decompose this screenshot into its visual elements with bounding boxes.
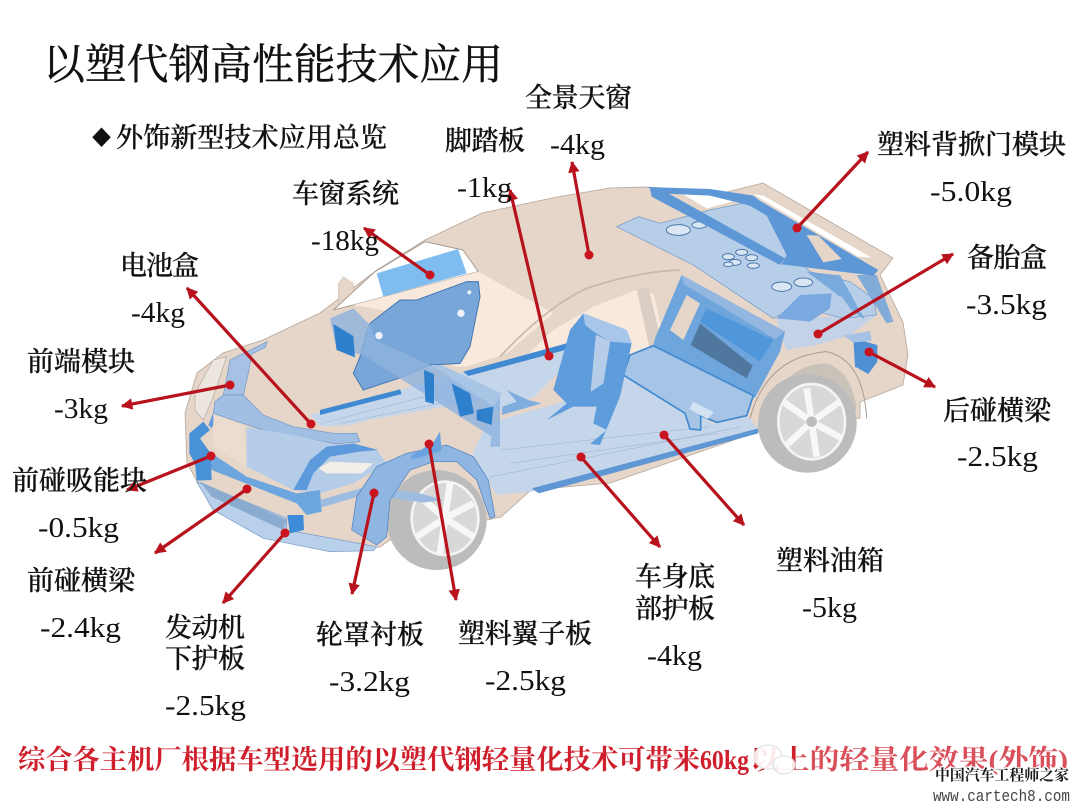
label: rear beam bbox=[943, 396, 1053, 473]
label: engine undershield: 发动机 bbox=[165, 613, 245, 643]
front seat frame bbox=[547, 313, 632, 445]
label: window system bbox=[292, 179, 400, 257]
label: front energy absorber bbox=[12, 466, 147, 544]
label: wheel liner bbox=[316, 620, 424, 698]
arrow: engine undershield bbox=[223, 528, 290, 603]
tailgate top rail bbox=[647, 187, 773, 216]
floor grooves bbox=[322, 387, 742, 477]
label: plastic tailgate: -5.0kg bbox=[930, 176, 1012, 208]
label: panoramic roof: 全景天窗 bbox=[525, 83, 632, 113]
label: plastic fender: -2.5kg bbox=[485, 665, 566, 697]
label: front end module: 前端模块 bbox=[27, 347, 135, 377]
seat top band bbox=[583, 313, 632, 343]
rear seat top band bbox=[682, 275, 785, 339]
label: underbody shield: 部护板 bbox=[635, 594, 715, 624]
upper dark strut bbox=[208, 400, 222, 428]
strip: left rocker bbox=[320, 342, 575, 415]
side interior bbox=[520, 290, 667, 362]
label: wheel liner: -3.2kg bbox=[329, 666, 410, 698]
cross support bbox=[320, 487, 443, 507]
label: wheel liner: 轮罩衬板 bbox=[316, 620, 424, 650]
grille bbox=[213, 413, 247, 467]
label: front energy absorber: 前碰吸能块 bbox=[12, 466, 147, 496]
sill strip bbox=[532, 428, 758, 493]
dark brackets bbox=[333, 324, 493, 425]
front beam bbox=[195, 437, 322, 515]
arrow: fender bbox=[424, 440, 456, 600]
rear wheel bbox=[750, 352, 867, 473]
tailgate left rail bbox=[650, 188, 785, 265]
arrow: front end module bbox=[122, 380, 234, 406]
floor bbox=[310, 342, 758, 495]
label: engine undershield: 下护板 bbox=[165, 644, 245, 674]
energy absorber bbox=[189, 422, 212, 481]
tray deep section bbox=[777, 293, 832, 322]
cooling opening bbox=[318, 462, 373, 473]
rear components bbox=[617, 187, 893, 430]
fender bracket bbox=[410, 432, 442, 459]
dark arc bbox=[293, 443, 378, 490]
arrow: spare tyre box bbox=[814, 254, 953, 338]
rear seat darker interior bbox=[700, 308, 773, 362]
tailgate right section bbox=[753, 197, 878, 276]
label: rear beam: -2.5kg bbox=[957, 441, 1038, 473]
panel circles bbox=[666, 222, 813, 291]
rear seat frame bbox=[653, 275, 785, 398]
cross beam top bbox=[432, 365, 502, 407]
wheel liner bbox=[352, 445, 495, 545]
roof rail bbox=[500, 270, 680, 357]
label: spare tyre box: 备胎盒 bbox=[967, 243, 1047, 273]
door module bbox=[353, 282, 480, 390]
arrow: battery box bbox=[187, 288, 316, 428]
car illustration bbox=[185, 183, 908, 570]
label: front end module bbox=[27, 347, 135, 425]
hood upright bbox=[223, 342, 267, 395]
rear floor panel bbox=[473, 377, 758, 495]
seat rail bracket bbox=[502, 390, 542, 415]
rear beam bracket bbox=[843, 331, 872, 342]
summary wash bbox=[795, 745, 1070, 775]
mesh pocket bbox=[691, 323, 753, 378]
bottom summary: 综合各主机厂根据车型选用的以塑代钢轻量化技术可带来 bbox=[18, 744, 700, 775]
front components bbox=[189, 342, 495, 552]
label: underbody shield: -4kg bbox=[647, 640, 702, 672]
subtitle: ◆ bbox=[92, 127, 111, 150]
front wheel bbox=[387, 470, 487, 570]
label: plastic fender: 塑料翼子板 bbox=[458, 619, 592, 649]
pillar bbox=[637, 287, 662, 350]
label: underbody shield: 车身底 bbox=[635, 562, 715, 592]
tailgate struts bbox=[807, 272, 893, 323]
label: footboard: -1kg bbox=[457, 172, 512, 204]
car body bbox=[185, 183, 908, 550]
arrow: panoramic roof bbox=[572, 162, 594, 260]
arrow: footboard bbox=[510, 190, 554, 360]
bottom summary: 60kg bbox=[700, 745, 749, 775]
label: front beam bbox=[27, 566, 137, 644]
rear beam bbox=[853, 338, 877, 374]
middle section windows and interior bbox=[333, 242, 680, 367]
label: plastic fender bbox=[458, 619, 592, 697]
label: plastic fuel tank bbox=[776, 546, 884, 624]
arrow: front energy absorber bbox=[127, 452, 216, 490]
front floor deck bbox=[310, 342, 572, 427]
upper beam bbox=[213, 395, 360, 444]
blue panoramic windshield panel bbox=[377, 249, 467, 297]
engine bracket bbox=[287, 515, 304, 533]
dash bar bbox=[330, 308, 500, 447]
lower bumper bbox=[197, 482, 377, 552]
arrow: window system bbox=[364, 228, 434, 280]
label: engine undershield bbox=[165, 613, 246, 722]
label: rear beam: 后碰横梁 bbox=[943, 396, 1053, 426]
label: plastic fuel tank: -5kg bbox=[802, 592, 857, 624]
label: footboard bbox=[445, 126, 525, 204]
middle components bbox=[330, 282, 632, 447]
bottom summary: 以上的轻量化效果(外饰) bbox=[750, 745, 1068, 775]
label: spare tyre box: -3.5kg bbox=[966, 289, 1047, 321]
label: battery box: -4kg bbox=[131, 297, 185, 329]
label: plastic fuel tank: 塑料油箱 bbox=[776, 546, 884, 576]
label: panoramic roof bbox=[525, 83, 632, 161]
muffler bbox=[689, 402, 714, 419]
arrow: front beam bbox=[155, 484, 252, 553]
arrow: wheel liner bbox=[352, 488, 378, 594]
label: engine undershield: -2.5kg bbox=[165, 690, 246, 722]
fuel tank bbox=[623, 346, 753, 430]
arrow: rear beam bbox=[864, 348, 935, 387]
bottom summary bbox=[18, 744, 1068, 775]
mid structure bbox=[247, 427, 387, 493]
front interior bbox=[353, 272, 553, 367]
subtitle: 外饰新型技术应用总览 bbox=[116, 123, 387, 153]
label: panoramic roof: -4kg bbox=[550, 129, 605, 161]
label: window system: 车窗系统 bbox=[292, 179, 400, 209]
arrow: tailgate bbox=[792, 152, 868, 232]
label: plastic tailgate bbox=[877, 130, 1066, 208]
headlight bbox=[195, 357, 227, 420]
tail panel bbox=[617, 203, 877, 318]
white glass gap top bbox=[682, 193, 750, 208]
arrow: fuel tank bbox=[660, 430, 744, 525]
label: front beam: -2.4kg bbox=[40, 612, 121, 644]
watermark icon bbox=[754, 745, 795, 774]
label: battery box: 电池盒 bbox=[120, 251, 199, 281]
label: front energy absorber: -0.5kg bbox=[38, 512, 119, 544]
lower grille slats bbox=[200, 482, 287, 530]
watermark: 中国汽车工程师之家 bbox=[935, 764, 1069, 785]
label: front end module: -3kg bbox=[54, 393, 108, 425]
label: front beam: 前碰横梁 bbox=[27, 566, 137, 596]
mirror bbox=[338, 277, 355, 307]
seat opening bbox=[591, 335, 610, 392]
label: underbody shield bbox=[635, 562, 715, 672]
white rear glass gap bbox=[753, 194, 872, 258]
windshield bbox=[333, 242, 478, 310]
door holes bbox=[375, 290, 471, 339]
label: spare tyre box bbox=[966, 243, 1047, 321]
label: window system: -18kg bbox=[311, 225, 379, 257]
label: plastic tailgate: 塑料背掀门模块 bbox=[877, 130, 1066, 160]
spare tyre tub lower bbox=[777, 315, 877, 350]
label: footboard: 脚踏板 bbox=[445, 126, 525, 156]
watermark bbox=[933, 764, 1070, 807]
title: 以塑代钢高性能技术应用 bbox=[43, 42, 503, 89]
arrow: underbody shield bbox=[576, 452, 660, 547]
label: battery box bbox=[120, 251, 199, 329]
